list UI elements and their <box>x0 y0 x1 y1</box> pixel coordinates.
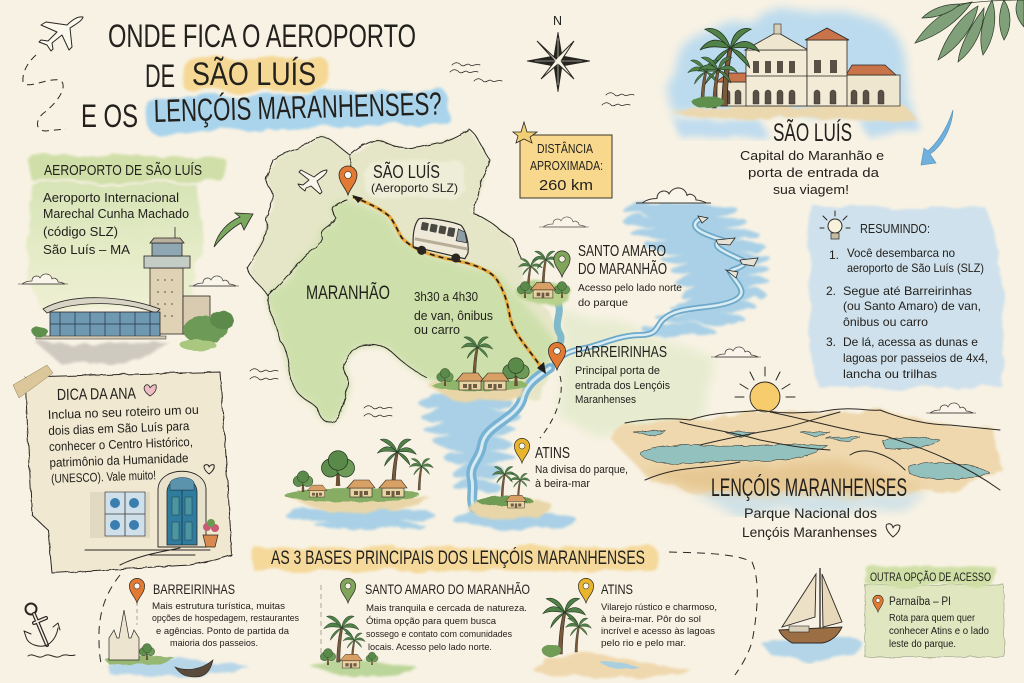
map: base land <box>247 130 565 423</box>
illustration: church and boat <box>105 658 250 677</box>
center block <box>746 50 807 106</box>
section: three bases <box>99 547 757 677</box>
distance callout <box>513 122 612 198</box>
blue shore wash <box>690 495 930 513</box>
sky wash <box>668 9 912 112</box>
base: Atins: Vilarejo rústico e charmoso, <box>601 602 717 613</box>
airport details: Marechal Cunha Machado <box>43 207 189 221</box>
star <box>513 122 537 143</box>
summary steps: 3. <box>826 335 836 349</box>
map label: São Luís <box>366 160 464 198</box>
base: Atins: à beira-mar. Pôr do sol <box>601 614 701 625</box>
panel: airport wash <box>28 183 205 310</box>
summary steps <box>826 246 988 381</box>
note text: Inclua no seu roteiro um ou <box>48 403 199 422</box>
label: Atins: Na divisa do parque, <box>535 464 628 476</box>
summary steps: lancha ou trilhas <box>843 367 937 381</box>
summary steps: lagoas por passeios de 4x4, <box>843 351 988 365</box>
airport details: (código SLZ) <box>43 225 118 239</box>
airport details <box>43 191 189 257</box>
label: Santo Amaro: do parque <box>578 297 628 309</box>
map label: travel time <box>414 289 493 337</box>
São Luís caption <box>740 118 884 197</box>
section heading strip <box>252 547 657 571</box>
boats on ocean <box>698 216 758 278</box>
tower <box>144 227 210 334</box>
São Luís caption: Capital do Maranhão e <box>740 148 884 163</box>
palms <box>700 28 759 106</box>
label: Barreirinhas <box>575 344 670 406</box>
title line 1: ONDE FICA O AEROPORTO <box>108 18 416 54</box>
box <box>520 135 612 198</box>
base: Barreirinhas: opções de hospedagem, restaurantes <box>152 613 299 624</box>
illustration: sailboat <box>760 568 860 660</box>
map: inner boundary <box>268 155 351 296</box>
label: Atins: à beira-mar <box>535 478 590 490</box>
dashed path to Atins <box>540 376 561 438</box>
icon: van <box>410 215 473 264</box>
compass rose: N <box>553 13 562 28</box>
map label: travel time: ou carro <box>414 322 460 337</box>
São Luís caption: sua viagem! <box>773 182 849 197</box>
icon: pink heart <box>144 385 156 396</box>
panel: other access header <box>866 566 996 586</box>
sun <box>735 367 795 412</box>
map label: São Luís: (Aeroporto SLZ) <box>371 181 458 195</box>
title highlight: Lençóis Maranhenses <box>146 88 449 133</box>
lower water bands <box>285 394 577 531</box>
base: Santo Amaro do Maranhão <box>312 578 530 676</box>
note text: patrimônio da Humanidade <box>49 451 189 470</box>
label: Atins <box>535 445 628 490</box>
airport details: São Luís – MA <box>43 243 131 257</box>
base: Atins: ATINS <box>601 581 633 597</box>
pin <box>340 578 356 603</box>
icon: small plane on map <box>298 170 327 194</box>
icon: outline heart <box>204 465 214 474</box>
distance text: DISTÂNCIA <box>537 141 593 156</box>
note paper <box>25 372 232 573</box>
Parnaíba text: Rota para quem quer <box>889 613 976 624</box>
ocean bands <box>622 203 770 336</box>
main river <box>471 368 550 508</box>
base: Atins: pelo rio e pelo mar. <box>601 638 686 649</box>
label: Lençóis Maranhenses: Parque Nacional dos <box>744 505 877 521</box>
Santo Amaro river <box>552 300 561 352</box>
arrow: São Luís to summary <box>921 110 953 165</box>
Parnaíba text: conhecer Atins e o lado <box>889 626 989 637</box>
base: Barreirinhas: maioria dos passeios. <box>170 638 258 649</box>
label: Santo Amaro: Acesso pelo lado norte <box>578 282 682 294</box>
bushes <box>32 311 234 351</box>
icon: palm leaves <box>915 0 1024 62</box>
dune lines <box>625 409 1000 490</box>
base: Santo Amaro do Maranhão: Mais tranquila e cercada de natureza. <box>366 603 527 614</box>
wings <box>717 82 747 106</box>
base: Santo Amaro do Maranhão: SANTO AMARO DO MARANHÃO <box>365 581 530 597</box>
illustration: coastal village <box>284 439 433 513</box>
illustration: airport <box>18 227 239 363</box>
Parnaíba text: leste do parque. <box>889 639 956 650</box>
plane icon with dashed trail <box>23 17 83 131</box>
map label: São Luís: SÃO LUÍS <box>373 161 440 182</box>
water wash <box>672 112 920 137</box>
airport details: Aeroporto Internacional <box>43 191 179 205</box>
illustration: palms and house <box>312 659 420 676</box>
map: green interior <box>268 200 555 423</box>
title line 3b: LENÇÓIS MARANHENSES? <box>153 85 442 129</box>
label: Santo Amaro <box>578 243 682 309</box>
label: Santo Amaro: DO MARANHÃO <box>578 258 667 278</box>
Parnaíba text: Parnaíba – PI <box>889 596 951 608</box>
note text: conhecer o Centro Histórico, <box>49 435 193 454</box>
illustration: Atins village <box>468 466 552 518</box>
east river <box>555 219 746 362</box>
map label: travel time: 3h30 a 4h30 <box>414 289 478 304</box>
pin <box>129 578 145 603</box>
base: Santo Amaro do Maranhão: sossego e contato com comunidades <box>366 629 512 640</box>
map label: Maranhão: MARANHÃO <box>306 282 390 304</box>
title line 2b: SÃO LUÍS <box>192 56 316 92</box>
label: Barreirinhas: BARREIRINHAS <box>575 344 667 361</box>
base: Atins <box>530 578 717 677</box>
base: Barreirinhas <box>105 578 299 677</box>
summary steps: ônibus ou carro <box>843 315 928 329</box>
note text <box>48 403 201 486</box>
summary steps: (ou Santo Amaro) de van, <box>843 299 981 313</box>
illustration: São Luís building <box>668 9 920 137</box>
summary steps: De lá, acessa as dunas e <box>843 335 978 349</box>
São Luís caption: porta de entrada da <box>748 165 880 180</box>
sand <box>672 106 920 122</box>
section heading: AS 3 BASES PRINCIPAIS DOS LENÇÓIS MARANHENSES <box>271 547 645 569</box>
base: Barreirinhas: BARREIRINHAS <box>153 581 235 597</box>
title line 2a: DE <box>145 58 175 94</box>
dashed frame <box>99 552 757 675</box>
pin: Parnaíba <box>873 595 883 612</box>
summary steps: Segue até Barreirinhas <box>843 284 972 298</box>
right block <box>807 40 847 106</box>
title highlight: São Luís <box>182 58 329 91</box>
distance callout: 260 km <box>539 177 593 194</box>
airport heading: AEROPORTO DE SÃO LUÍS <box>44 162 202 179</box>
base: Barreirinhas: e agências. Ponto de partida da <box>156 626 290 637</box>
pin <box>578 578 594 603</box>
base: Atins: incrível e acesso às lagoas <box>601 626 715 637</box>
panel: other access body <box>865 585 1004 657</box>
note: Dica da Ana <box>13 365 232 573</box>
compass rose <box>527 13 590 92</box>
illustration: dunes <box>612 367 1002 513</box>
clouds around water <box>539 188 976 413</box>
tape <box>13 365 53 398</box>
illustration: Barreirinhas village <box>428 337 530 402</box>
summary steps: 2. <box>826 284 836 298</box>
pin: Atins <box>514 438 530 463</box>
water and rivers <box>285 203 770 531</box>
driving route with arrow <box>352 195 546 374</box>
pin: Barreirinhas <box>548 342 566 370</box>
pin: Santo Amaro <box>554 251 570 277</box>
note text: dois dias em São Luís para <box>48 419 190 438</box>
icon: light bulb <box>820 211 850 239</box>
map of Maranhão <box>247 130 715 440</box>
label: Atins: ATINS <box>535 445 570 462</box>
map label: travel time: de van, ônibus <box>414 308 493 323</box>
note heading: DICA DA ANA <box>57 386 136 404</box>
sand shadow <box>640 462 930 498</box>
summary steps: aeroporto de São Luís (SLZ) <box>847 261 984 275</box>
base: Barreirinhas: Mais estrutura turística, muitas <box>152 601 285 612</box>
São Luís caption: SÃO LUÍS <box>773 118 852 147</box>
panel: other access <box>865 566 1004 657</box>
map: outline <box>247 130 520 423</box>
label: Barreirinhas: Principal porta de <box>575 365 660 377</box>
label: Lençóis Maranhenses <box>711 473 907 540</box>
icon: anchor <box>24 604 75 657</box>
decorative waves near title <box>450 63 502 82</box>
Parnaíba text <box>889 596 989 650</box>
sand <box>612 410 1002 500</box>
title <box>81 18 449 134</box>
label: Barreirinhas: entrada dos Lençóis <box>575 380 670 392</box>
arrow: airport to map <box>214 213 253 247</box>
waves near map tip <box>250 369 392 417</box>
summary heading: RESUMINDO: <box>860 221 930 236</box>
distance callout: APROXIMADA: <box>530 158 603 173</box>
title line 3a: E OS <box>81 98 138 134</box>
panel: airport <box>28 156 225 310</box>
terminal <box>43 298 160 313</box>
summary steps: 1. <box>829 248 839 262</box>
panel: airport heading strip <box>30 156 225 181</box>
illustration: door and tile window <box>85 471 219 565</box>
map: coastal wash <box>560 310 715 440</box>
summary steps: Você desembarca no <box>847 246 955 260</box>
panel: summary <box>809 207 1003 388</box>
illustration: island with palms <box>530 653 690 677</box>
waves near compass <box>602 93 634 106</box>
label: Lençóis Maranhenses: Lençóis Maranhenses <box>742 524 877 540</box>
base: Santo Amaro do Maranhão: Ótima opção para quem busca <box>366 616 497 627</box>
base: Santo Amaro do Maranhão: locais. Acesso pelo lado norte. <box>368 642 492 653</box>
illustration: Santo Amaro village <box>517 251 572 305</box>
lagoons <box>633 430 990 479</box>
note text: (UNESCO). Vale muito! <box>51 468 156 486</box>
label: Barreirinhas: Maranhenses <box>575 394 636 406</box>
label: Lençóis Maranhenses: LENÇÓIS MARANHENSES <box>711 473 907 502</box>
pin: São Luís <box>339 166 357 195</box>
label: Santo Amaro: SANTO AMARO <box>578 243 666 260</box>
